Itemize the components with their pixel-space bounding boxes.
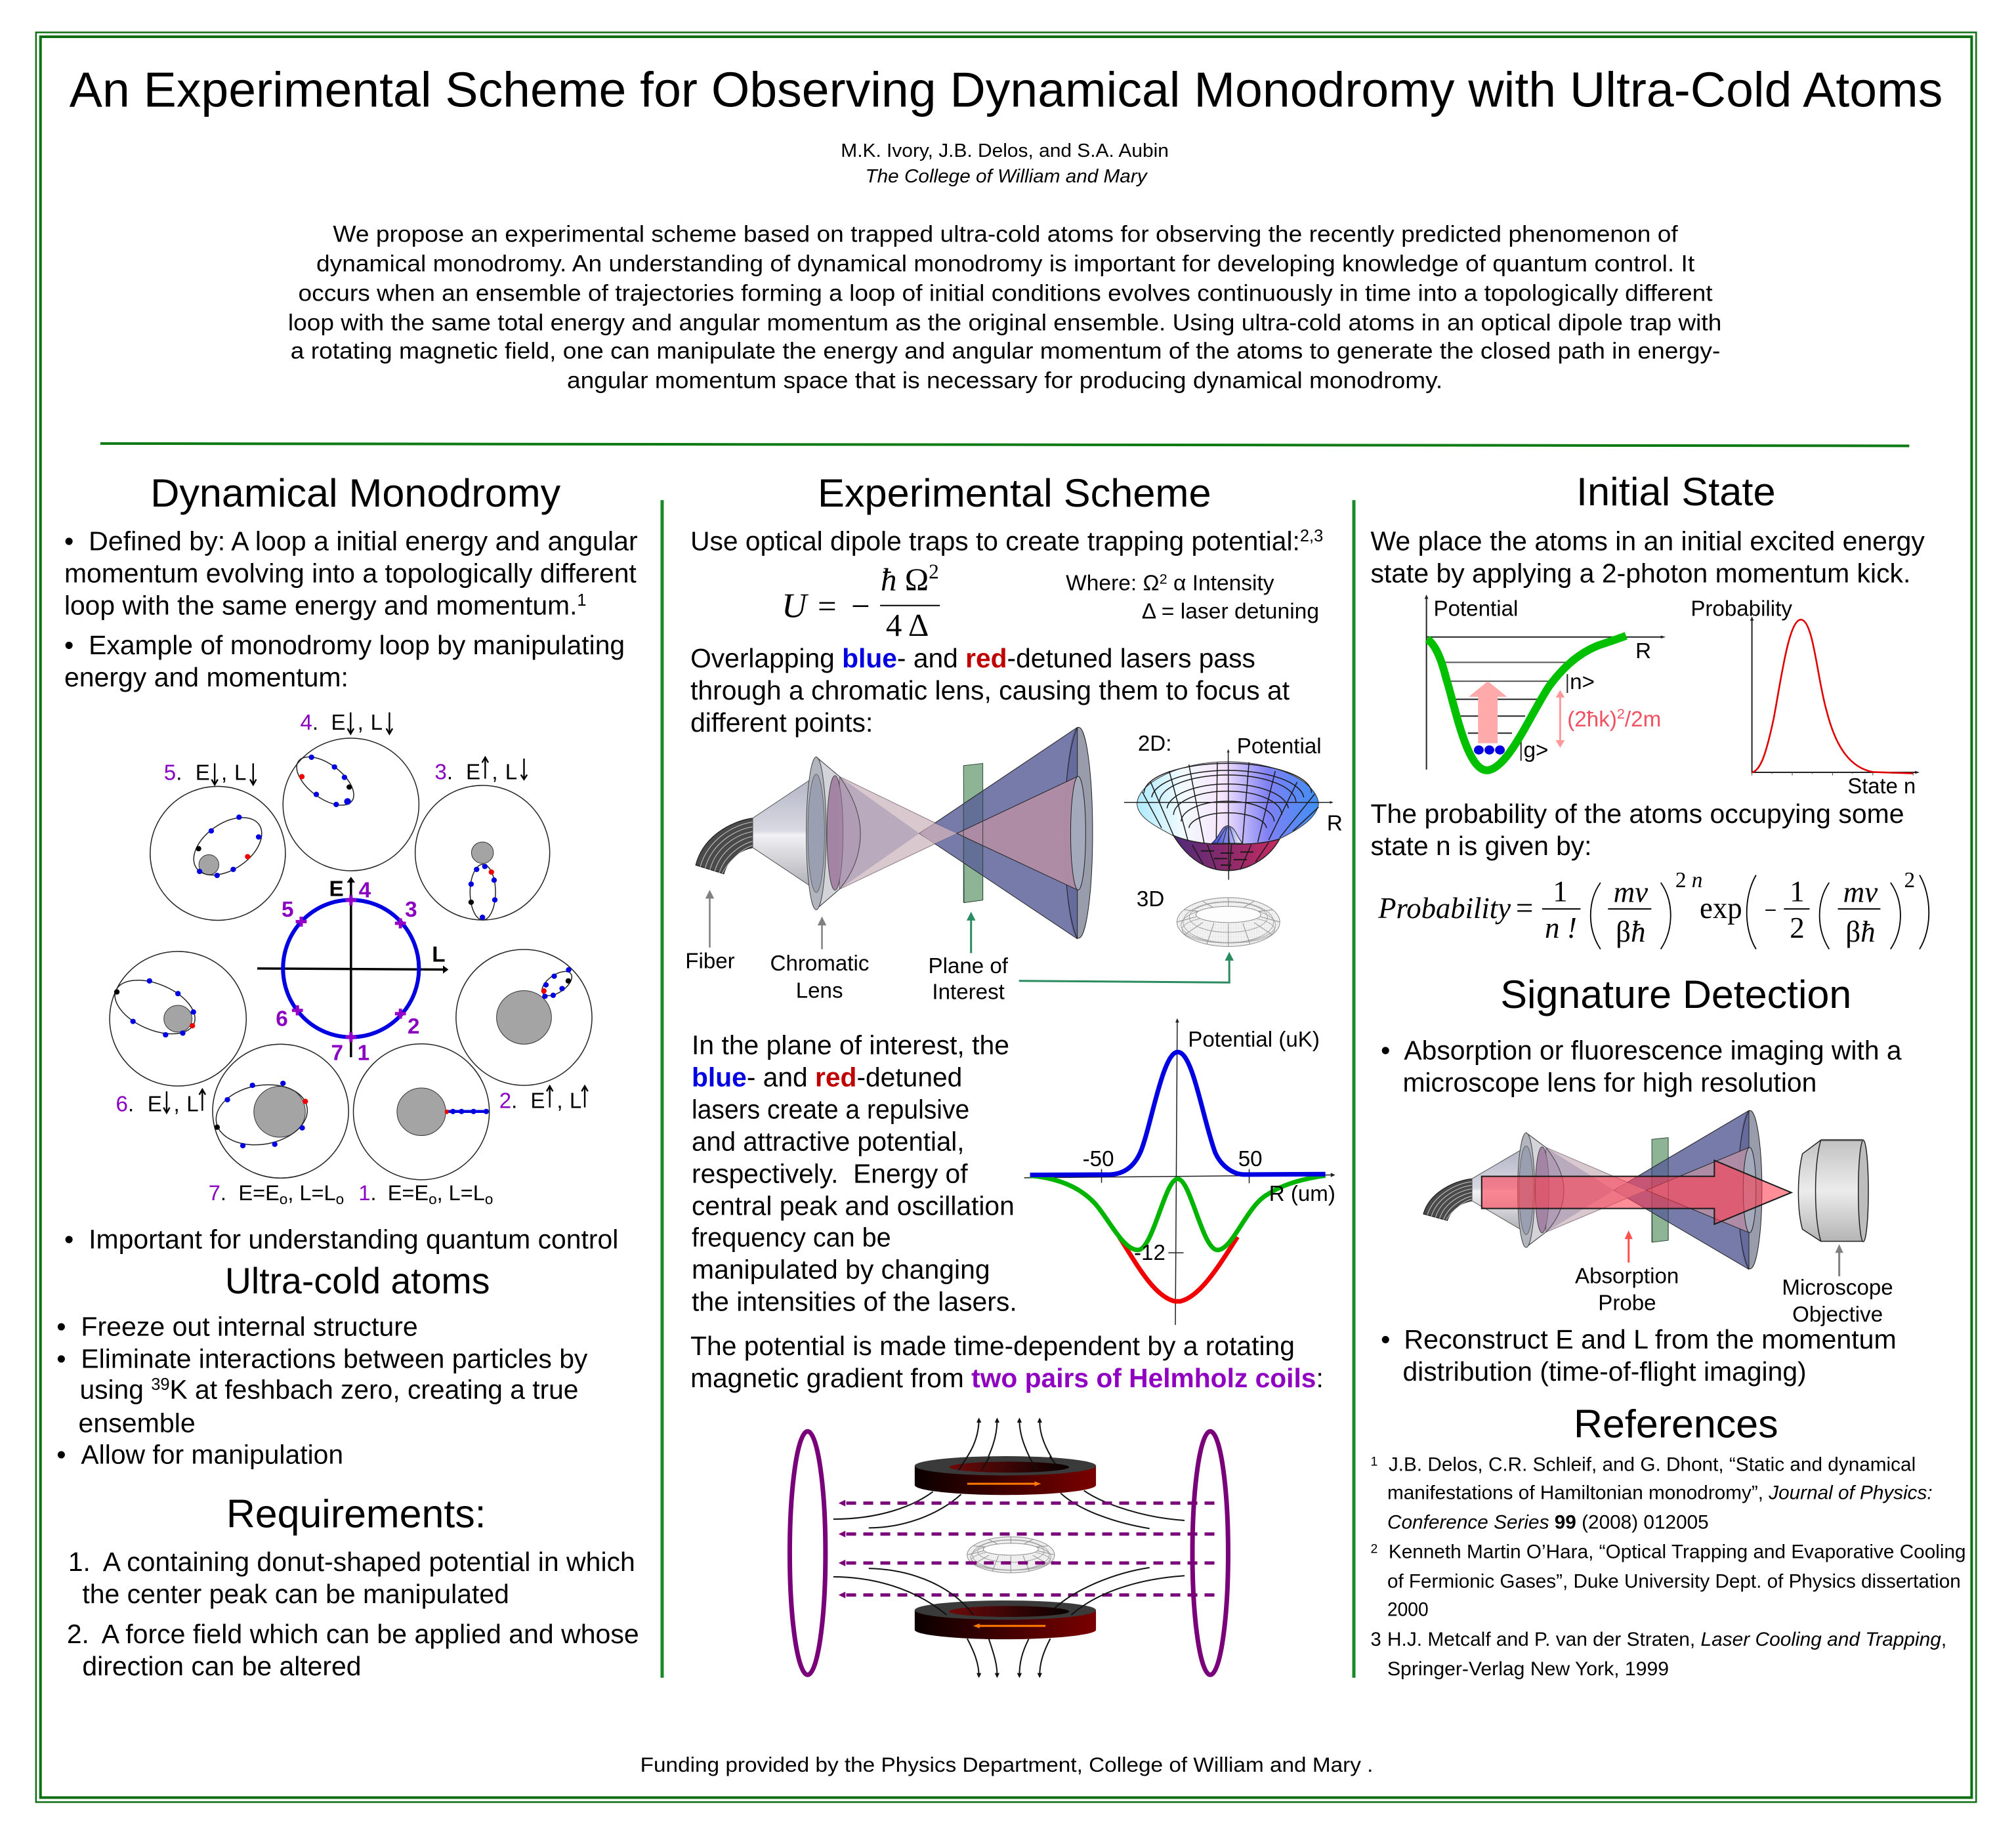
microscope objective — [1798, 1140, 1868, 1242]
state captions: . — [447, 761, 453, 785]
loop point numbers: 6 — [276, 1007, 288, 1031]
abstract: angular momentum space that is necessary for producing dynamical monodromy. — [567, 367, 1442, 394]
imaging bullet: microscope lens for high resolution — [1402, 1067, 1816, 1097]
reconstruction bullet: distribution (time-of-flight imaging) — [1402, 1356, 1807, 1387]
ultra-cold atoms bullets: • — [56, 1312, 66, 1342]
state captions: 2 — [499, 1089, 511, 1114]
reference list: 2000 — [1387, 1600, 1429, 1621]
ultra-cold atoms bullets: Freeze out internal structure — [81, 1312, 418, 1342]
well labels: 2 — [1617, 705, 1625, 722]
helmholtz coils diagram — [789, 1417, 1228, 1678]
state captions: E — [466, 761, 480, 785]
state captions: L — [371, 711, 383, 735]
panel: dynamical monodromy — [56, 470, 639, 1681]
optic labels: Interest — [932, 980, 1005, 1004]
detection labels: Objective — [1792, 1303, 1883, 1327]
state captions: L — [505, 761, 517, 785]
loop point numbers: 4 — [359, 879, 371, 903]
reference list: Kenneth Martin O’Hara, “Optical Trapping and Evaporative Cooling — [1389, 1542, 1966, 1563]
chart labels: R (um) — [1269, 1182, 1335, 1206]
requirements list: 2. — [67, 1619, 89, 1649]
loop point numbers: 5 — [282, 898, 294, 922]
plane of interest text: lasers create a repulsive — [692, 1094, 969, 1124]
imaging bullet: Absorption or fluorescence imaging with a — [1404, 1035, 1902, 1065]
probability text: The probability of the atoms occupying some — [1370, 799, 1904, 829]
optical dipole text: 2,3 — [1300, 527, 1323, 545]
reference list: manifestations of Hamiltonian monodromy”, Journal of Physics: — [1387, 1482, 1933, 1503]
rotating magnetic gradient text: magnetic gradient from two pairs of Helmholz coils: — [690, 1363, 1324, 1393]
detection labels: Absorption — [1575, 1264, 1679, 1288]
monodromy loop diagram: 7 — [209, 1181, 220, 1205]
right column divider — [1353, 500, 1356, 1678]
orbit circles — [106, 713, 592, 1180]
optical setup diagram — [685, 727, 1234, 1004]
initial state text: state by applying a 2-photon momentum kick. — [1370, 558, 1910, 589]
equation: probability: βħ — [1845, 915, 1876, 948]
state captions: 4 — [300, 711, 312, 735]
reference list: J.B. Delos, C.R. Schleif, and G. Dhont, “Static and dynamical — [1389, 1454, 1916, 1475]
monodromy loop diagram: o — [336, 1191, 344, 1207]
state captions: , — [173, 1093, 180, 1117]
plane of interest text: respectively. Energy of — [692, 1158, 968, 1188]
title: An Experimental Scheme for Observing Dynamical Monodromy with Ultra-Cold Atoms — [70, 62, 1942, 117]
equation: trapping potential: = — [818, 588, 837, 625]
axis labels — [329, 877, 446, 967]
chart labels: 50 — [1238, 1147, 1263, 1171]
potential surface labels: Potential — [1237, 734, 1322, 759]
potential vs radius chart — [1024, 1018, 1335, 1325]
definition text: 1 — [577, 591, 587, 610]
abstract: loop with the same total energy and angular momentum as the original ensemble. Using ultra-cold atoms in an optical dipole trap with — [288, 310, 1721, 336]
reference list: 1 — [1370, 1454, 1377, 1469]
well labels: g> — [1524, 738, 1548, 763]
ultra-cold atoms bullets — [56, 1312, 588, 1470]
loop point numbers: 7 — [331, 1041, 343, 1065]
definition text: Defined by: A loop a initial energy and angular — [89, 526, 638, 556]
state captions: E — [331, 711, 346, 735]
state captions: L — [570, 1089, 581, 1114]
equation: trapping potential: 4 Δ — [886, 607, 929, 643]
well labels — [1433, 596, 1661, 763]
overlapping lasers text: through a chromatic lens, causing them to focus at — [690, 675, 1290, 705]
reference list: 3 — [1370, 1629, 1381, 1650]
imaging bullet — [1381, 1035, 1902, 1097]
state captions: , — [556, 1089, 563, 1114]
equation: probability: 2 — [1790, 911, 1805, 944]
definition text — [64, 526, 638, 692]
field line arrowheads — [976, 1417, 1042, 1678]
plane of interest text: manipulated by changing — [692, 1254, 990, 1284]
plane of interest text: central peak and oscillation — [692, 1190, 1015, 1221]
left column divider — [660, 500, 663, 1678]
reference list: Conference Series 99 (2008) 012005 — [1387, 1512, 1709, 1533]
monodromy loop diagram — [106, 711, 592, 1207]
loop point numbers: 2 — [408, 1014, 420, 1039]
probability text: state n is given by: — [1370, 831, 1591, 861]
potential well diagram — [1425, 595, 1666, 770]
authors and affiliation: The College of William and Mary — [866, 166, 1148, 187]
definition text: loop with the same energy and momentum. — [64, 590, 577, 620]
requirements list: the center peak can be manipulated — [82, 1579, 509, 1609]
detection labels — [1575, 1264, 1893, 1327]
optic labels: Lens — [796, 978, 843, 1003]
state captions: L — [186, 1093, 199, 1117]
funding note: Funding provided by the Physics Department, College of William and Mary . — [640, 1753, 1373, 1776]
optic labels — [685, 949, 1009, 1004]
equation: probability: exp — [1700, 891, 1742, 925]
equation: probability: 2 — [1904, 868, 1915, 892]
probability distribution chart — [1690, 596, 1920, 799]
heading: signature detection: Signature Detection — [1500, 972, 1851, 1016]
state captions: . — [176, 761, 182, 785]
initial state text: We place the atoms in an initial excited energy — [1370, 526, 1925, 556]
ultra-cold atoms bullets: using — [79, 1375, 144, 1405]
well labels: R — [1635, 639, 1651, 663]
state captions: 3 — [434, 761, 447, 785]
absorption probe arrow — [1482, 1160, 1792, 1224]
heading: dynamical monodromy: Dynamical Monodromy — [150, 470, 561, 515]
equation: probability: mv — [1614, 875, 1648, 908]
abstract — [288, 220, 1721, 394]
equation notes: α Intensity — [1167, 571, 1274, 595]
authors and affiliation — [841, 140, 1169, 187]
plane of interest text — [692, 1030, 1017, 1316]
state captions: 6 — [116, 1093, 128, 1117]
well labels: Potential — [1433, 596, 1518, 621]
overlapping lasers text — [690, 643, 1290, 738]
state captions: . — [128, 1093, 134, 1117]
lower coil — [915, 1600, 1096, 1639]
state captions: E — [196, 761, 210, 785]
lower field lines — [833, 1568, 1185, 1675]
monodromy loop diagram: 1 — [358, 1181, 371, 1205]
equation: trapping potential: 2 — [929, 560, 939, 583]
rotating magnetic gradient text — [690, 1331, 1324, 1393]
quantum control bullet: • — [64, 1224, 74, 1254]
probability labels: State n — [1847, 774, 1916, 799]
equation notes: Where: Ω — [1066, 571, 1158, 595]
reference list: 2 — [1370, 1542, 1377, 1557]
state captions: E — [148, 1093, 162, 1117]
field lines — [833, 1421, 1185, 1528]
chart labels: -50 — [1083, 1147, 1114, 1171]
reference list — [1370, 1454, 1966, 1680]
requirements list — [67, 1547, 639, 1681]
state captions — [116, 711, 581, 1117]
ultra-cold atoms bullets: • — [56, 1344, 66, 1374]
detection labels: Probe — [1598, 1291, 1656, 1315]
probe arrow pointer — [1628, 1235, 1629, 1263]
state captions: L — [234, 761, 246, 785]
E and L direction arrows in captions — [163, 713, 588, 1113]
chart labels: -12 — [1134, 1241, 1166, 1265]
label arrows — [705, 890, 1234, 982]
potential surface labels: 2D: — [1138, 732, 1171, 756]
monodromy loop diagram: , L=L — [437, 1181, 485, 1205]
3D torus potential: 3D — [1137, 887, 1164, 911]
monodromy loop diagram: o — [280, 1191, 287, 1207]
upper coil — [915, 1456, 1096, 1495]
potential surface labels: R — [1327, 812, 1343, 836]
definition text: • — [64, 630, 74, 660]
ultra-cold atoms bullets: • — [56, 1440, 66, 1470]
definition text: momentum evolving into a topologically different — [64, 558, 637, 589]
heading: references: References — [1574, 1401, 1778, 1446]
equation: trapping potential: U — [782, 587, 809, 625]
chart labels: Potential (uK) — [1188, 1028, 1320, 1052]
rotating magnetic gradient text: The potential is made time-dependent by a rotating — [690, 1331, 1295, 1361]
ultra-cold atoms bullets: K at feshbach zero, creating a true — [170, 1375, 578, 1405]
ultra-cold atoms bullets: ensemble — [79, 1408, 196, 1438]
equation: trapping potential: − — [851, 588, 870, 625]
heading: ultra-cold atoms: Ultra-cold atoms — [225, 1261, 490, 1301]
plane of interest text: frequency can be — [692, 1222, 891, 1252]
equation: probability — [1377, 868, 1929, 949]
equation: trapping potential — [782, 560, 940, 643]
equation notes: 2 — [1160, 570, 1167, 587]
optics and cones — [1423, 1110, 1762, 1269]
optic labels: Plane of — [929, 954, 1009, 978]
equation: probability: = — [1516, 891, 1533, 925]
initial state text — [1370, 526, 1925, 589]
plane of interest text: and attractive potential, — [692, 1126, 964, 1156]
panel: signature detection — [1381, 972, 1902, 1387]
potential surface labels — [1138, 732, 1343, 836]
probability text — [1370, 799, 1904, 861]
state captions: 5 — [164, 761, 176, 785]
equation: probability: 1 — [1790, 875, 1805, 908]
2D potential surface — [1124, 732, 1343, 880]
loop point numbers: 1 — [358, 1041, 369, 1065]
reference list: Springer-Verlag New York, 1999 — [1387, 1659, 1669, 1680]
equation notes — [1066, 570, 1319, 623]
requirements list: 1. — [68, 1547, 91, 1577]
state captions: , — [221, 761, 227, 785]
requirements list: A containing donut-shaped potential in which — [103, 1547, 635, 1577]
abstract: occurs when an ensemble of trajectories forming a loop of initial conditions evolves continuously in time into a topologically different — [299, 280, 1713, 306]
definition text: energy and momentum: — [64, 662, 348, 692]
optic labels: Fiber — [685, 949, 735, 973]
reference list: of Fermionic Gases”, Duke University Dept. of Physics dissertation — [1387, 1572, 1961, 1593]
imaging bullet: • — [1381, 1035, 1390, 1065]
abstract: a rotating magnetic field, one can manipulate the energy and angular momentum of the atoms to generate the closed path in energy- — [291, 338, 1720, 364]
reference list: H.J. Metcalf and P. van der Straten, Laser Cooling and Trapping , — [1387, 1629, 1946, 1650]
abstract: dynamical monodromy. An understanding of dynamical monodromy is important for developing knowledge of quantum control. It — [316, 250, 1694, 276]
overlapping lasers text: different points: — [690, 707, 873, 738]
panel: initial state — [1370, 469, 1929, 949]
loop point numbers — [276, 879, 420, 1065]
reconstruction bullet: Reconstruct E and L from the momentum — [1404, 1324, 1897, 1354]
requirements list: A force field which can be applied and whose — [102, 1619, 639, 1649]
state captions: E — [530, 1089, 545, 1114]
fiber, chromatic lens, and laser cones — [696, 727, 1093, 939]
monodromy loop diagram: o — [429, 1191, 437, 1207]
ultra-cold atoms bullets: Eliminate interactions between particles by — [81, 1344, 588, 1374]
trapped atom torus — [967, 1537, 1055, 1573]
reconstruction bullet — [1381, 1324, 1897, 1387]
central E-L loop — [257, 877, 448, 1057]
well labels: n> — [1570, 670, 1595, 694]
objective arrow pointer — [1838, 1249, 1840, 1276]
optic labels: Chromatic — [770, 951, 869, 976]
probability labels — [1690, 596, 1916, 799]
gradient arrow over torus — [967, 1561, 1055, 1564]
monodromy loop diagram: , L=L — [287, 1181, 336, 1205]
probability labels: Probability — [1690, 596, 1792, 621]
ultra-cold atoms bullets: Allow for manipulation — [81, 1440, 343, 1470]
magnetic gradient dashed arrows — [839, 1500, 1215, 1599]
axis labels: L — [432, 942, 446, 967]
equation: trapping potential: ħ Ω — [881, 561, 929, 597]
monodromy loop diagram: E=E — [238, 1181, 280, 1205]
state captions: , — [358, 711, 364, 735]
well labels: /2m — [1625, 707, 1661, 732]
abstract: We propose an experimental scheme based on trapped ultra-cold atoms for observing the recently predicted phenomenon of — [333, 220, 1678, 247]
axis labels: E — [329, 877, 344, 902]
equation: probability: 2 n — [1675, 868, 1702, 892]
plane of interest text: the intensities of the lasers. — [692, 1286, 1017, 1316]
equation notes: Δ = laser detuning — [1142, 599, 1319, 623]
chart labels — [1083, 1028, 1335, 1265]
optical dipole text: Use optical dipole traps to create trapping potential: — [690, 526, 1300, 556]
panel: references — [1370, 1401, 1966, 1680]
monodromy loop diagram: . — [371, 1181, 377, 1205]
panel: experimental scheme — [685, 470, 1343, 1678]
overlapping lasers text: Overlapping blue- and red-detuned lasers pass — [690, 643, 1255, 673]
equation: probability: 1 — [1553, 875, 1568, 908]
monodromy loop diagram: o — [485, 1191, 493, 1207]
plane of interest text: blue- and red-detuned — [692, 1062, 962, 1093]
equation: probability: mv — [1843, 875, 1878, 908]
heading: requirements: Requirements: — [226, 1492, 486, 1536]
monodromy loop diagram: E=E — [388, 1181, 429, 1205]
heading: experimental scheme: Experimental Scheme — [818, 470, 1211, 515]
reconstruction bullet: • — [1381, 1324, 1390, 1354]
plane of interest text: In the plane of interest, the — [692, 1030, 1009, 1060]
equation: probability: Probability — [1377, 892, 1511, 925]
definition text: Example of monodromy loop by manipulating — [89, 630, 625, 660]
horizontal divider — [100, 444, 1909, 446]
3D torus potential — [1137, 887, 1280, 946]
purple helmholtz coils — [789, 1431, 1228, 1675]
ultra-cold atoms bullets: 39 — [151, 1375, 170, 1394]
equation: probability: βħ — [1616, 915, 1646, 948]
well labels: (2ħk) — [1567, 707, 1617, 732]
definition text: • — [64, 526, 74, 556]
loop point numbers: 3 — [405, 898, 417, 922]
equation: probability: n ! — [1545, 911, 1577, 944]
state captions: . — [511, 1089, 517, 1114]
authors and affiliation: M.K. Ivory, J.B. Delos, and S.A. Aubin — [841, 140, 1169, 161]
monodromy loop diagram: . — [220, 1181, 226, 1205]
absorption imaging diagram — [1423, 1110, 1893, 1327]
requirements list: direction can be altered — [82, 1651, 362, 1681]
quantum control bullet: Important for understanding quantum control — [89, 1224, 618, 1254]
state captions: . — [312, 711, 318, 735]
heading: initial state: Initial State — [1576, 469, 1776, 514]
detection labels: Microscope — [1782, 1276, 1893, 1300]
state captions: , — [492, 761, 498, 785]
